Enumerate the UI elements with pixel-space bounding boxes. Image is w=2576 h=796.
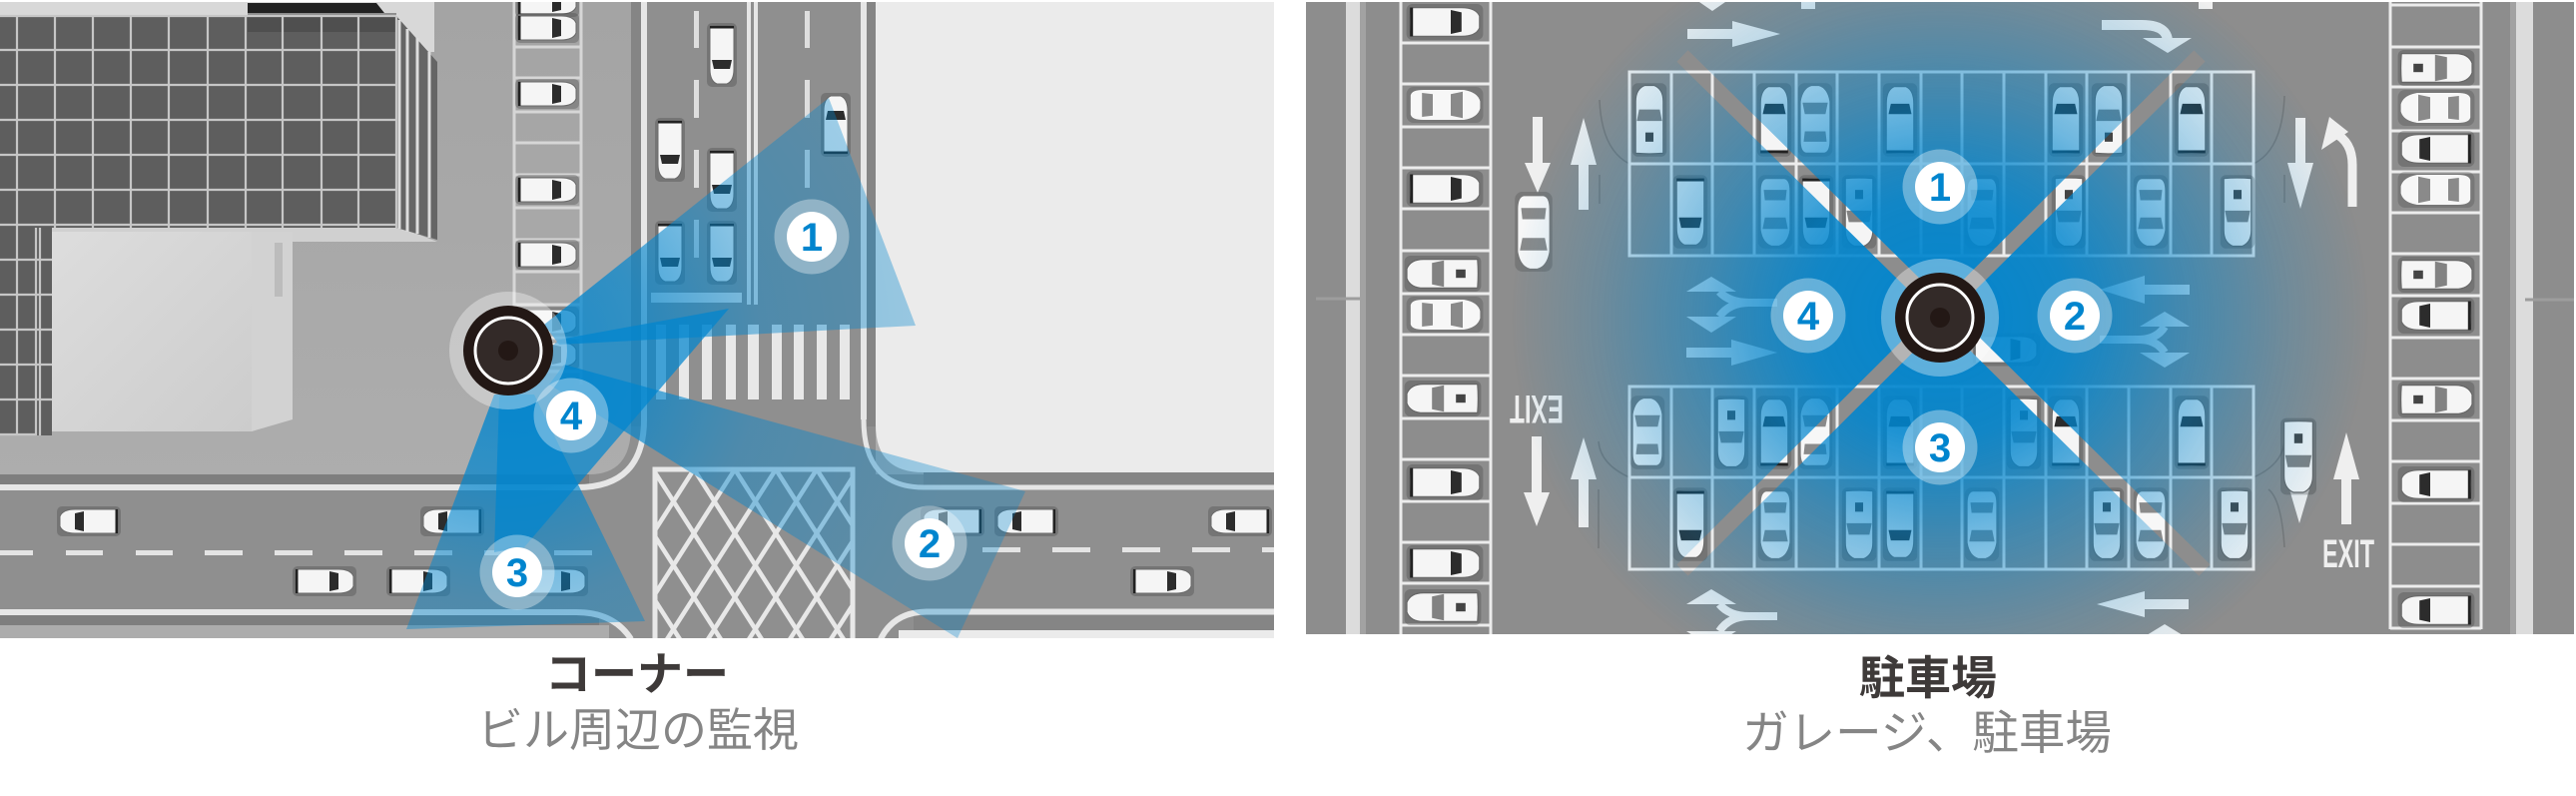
cone 4 <box>494 309 729 552</box>
exit markings: EXIT <box>2322 532 2374 576</box>
light city block <box>876 2 1278 472</box>
badge 2: right: 2 <box>2064 295 2086 339</box>
building <box>0 2 437 435</box>
horizontal road <box>0 419 1278 639</box>
badge 2: left: 2 <box>919 522 941 566</box>
badge 1: right: 1 <box>1929 166 1951 210</box>
subheading: parking: ガレージ、駐車場 <box>1742 707 2112 759</box>
vertical road <box>631 2 876 481</box>
blue coverage glow <box>1528 2 2346 634</box>
crosswalk <box>656 325 850 399</box>
cars: moving <box>1515 192 2316 494</box>
hatched box <box>653 469 855 639</box>
panel: parking scene <box>1306 2 2574 647</box>
curbs <box>1346 2 2533 634</box>
cars: lots <box>1630 83 2254 561</box>
parking lots <box>1629 72 2254 569</box>
badge 2: left <box>893 505 966 581</box>
cone 1 <box>544 98 916 345</box>
cars: left column <box>1405 4 1483 625</box>
badge 3: right: 3 <box>1929 426 1951 470</box>
badge 3: left <box>479 535 555 609</box>
subheading: corner: ビル周辺の監視 <box>477 704 799 756</box>
cars: right column <box>2398 50 2474 628</box>
cone 2 <box>549 365 1025 638</box>
badge 3: left: 3 <box>506 551 528 595</box>
badge 4: left: 4 <box>560 395 583 438</box>
panel: corner scene <box>0 0 1278 639</box>
exit markings: EXIT <box>1510 387 1564 430</box>
camera coverage cones <box>406 98 1025 638</box>
left parking column <box>1401 2 1491 634</box>
heading: parking: 駐車場 <box>1859 652 1997 704</box>
badge 1: left: 1 <box>801 216 823 260</box>
side bollards <box>1316 299 2574 300</box>
cone 3 <box>406 395 645 629</box>
badge 1: right <box>1903 150 1977 224</box>
road arrows <box>1524 2 2359 647</box>
curved arrow stems <box>1719 25 2352 631</box>
badge 2: right <box>2037 278 2113 354</box>
badge 4: right: 4 <box>1797 295 1820 339</box>
parking bays <box>514 2 581 385</box>
badge 4: left <box>533 378 609 453</box>
heading: corner: コーナー <box>545 648 729 700</box>
camera: right <box>1881 259 1999 377</box>
badge 3: right <box>1903 409 1977 485</box>
right parking column <box>2390 2 2481 629</box>
light poles <box>1599 96 2284 548</box>
badge 4: right <box>1771 278 1845 354</box>
exit markings <box>1510 387 2374 576</box>
badge 1: left <box>775 200 849 274</box>
cars: left scene <box>57 0 1272 596</box>
camera: left <box>449 292 567 409</box>
